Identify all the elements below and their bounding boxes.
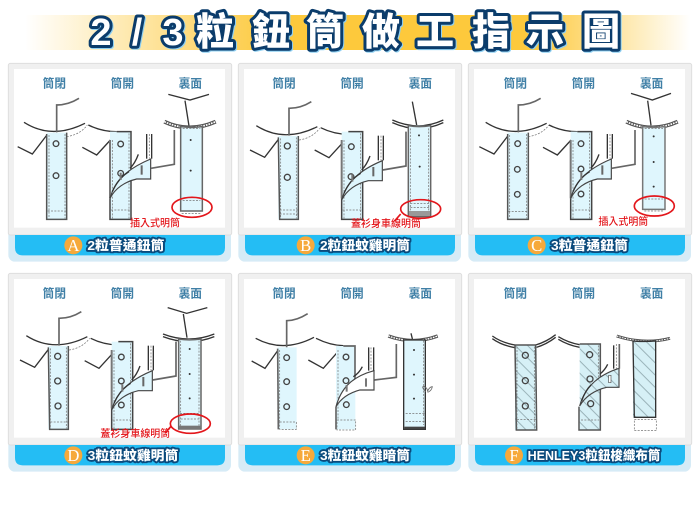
label bar: B	[300, 236, 311, 255]
back view	[626, 93, 678, 211]
panel: F HENLEY3粒鈕梭織布筒	[468, 273, 692, 472]
back view	[164, 94, 216, 213]
back view	[163, 308, 214, 429]
panel: E 3粒鈕蚊雞暗筒: 筒開	[340, 287, 364, 301]
panel: E 3粒鈕蚊雞暗筒	[238, 273, 462, 472]
label bar: F	[509, 446, 519, 465]
label bar	[64, 446, 178, 465]
back view	[617, 336, 670, 431]
panel: A 2粒普通鈕筒: 筒開	[111, 77, 134, 91]
title: 指	[472, 12, 510, 54]
panel: A 2粒普通鈕筒: 裏面	[179, 77, 202, 91]
label bar	[297, 236, 410, 255]
panel: E 3粒鈕蚊雞暗筒: 筒閉	[272, 287, 296, 301]
panel: D 3粒鈕蚊雞明筒: 裏面	[179, 287, 202, 301]
panel: D 3粒鈕蚊雞明筒: 筒閉	[43, 287, 66, 301]
label bar: 2粒鈕蚊雞明筒	[320, 238, 410, 253]
closed placket	[252, 314, 314, 429]
panel: D 3粒鈕蚊雞明筒	[8, 273, 232, 472]
callout	[351, 200, 441, 230]
title: /	[132, 12, 143, 54]
open placket	[308, 338, 396, 430]
title: 示	[526, 12, 564, 54]
panel: C 3粒普通鈕筒: 裏面	[640, 77, 664, 91]
title	[25, 12, 690, 54]
closed placket	[492, 335, 556, 430]
panel: C 3粒普通鈕筒: 筒閉	[504, 77, 527, 91]
label bar: 3粒鈕蚊雞暗筒	[320, 448, 410, 463]
callout: 插入式明筒	[130, 216, 180, 229]
panel: B 2粒鈕蚊雞明筒	[238, 63, 462, 262]
panel: F HENLEY3粒鈕梭織布筒: 筒開	[572, 287, 595, 301]
title background band	[25, 15, 690, 50]
open placket	[543, 125, 635, 219]
callout: 蓋衫身車線明筒	[351, 217, 421, 230]
panel: B 2粒鈕蚊雞明筒: 裏面	[409, 77, 432, 91]
panel: B 2粒鈕蚊雞明筒: 筒閉	[272, 77, 296, 91]
callout: 插入式明筒	[598, 215, 648, 228]
label bar: E	[301, 446, 311, 465]
title: 粒	[196, 12, 234, 54]
callout	[130, 197, 212, 229]
closed placket	[479, 98, 549, 219]
callout	[100, 414, 210, 440]
closed placket	[20, 312, 90, 429]
back view	[388, 333, 438, 429]
panel: E 3粒鈕蚊雞暗筒: 裏面	[409, 287, 432, 301]
open placket	[82, 125, 174, 219]
open placket	[85, 338, 176, 429]
label bar: A	[67, 236, 79, 255]
panel: F HENLEY3粒鈕梭織布筒: 筒閉	[504, 287, 527, 301]
open placket	[315, 128, 406, 219]
label bar: 3粒鈕蚊雞明筒	[88, 448, 178, 463]
label bar: C	[531, 236, 542, 255]
label bar: 3粒普通鈕筒	[551, 238, 628, 253]
back view	[392, 102, 443, 217]
title: 做	[362, 12, 400, 54]
title: 筒	[306, 12, 344, 54]
label bar: 2粒普通鈕筒	[87, 238, 164, 253]
title: 鈕	[252, 12, 290, 54]
label bar	[528, 236, 628, 255]
title: 圖	[582, 12, 620, 54]
label bar	[64, 236, 164, 255]
title: 3	[162, 12, 184, 54]
panel: A 2粒普通鈕筒: 筒閉	[43, 77, 66, 91]
panel: B 2粒鈕蚊雞明筒: 筒開	[340, 77, 364, 91]
title: 工	[416, 12, 454, 54]
label bar: D	[67, 446, 79, 465]
panel: A 2粒普通鈕筒	[8, 63, 232, 262]
closed placket	[250, 102, 320, 219]
label bar: HENLEY3粒鈕梭織布筒	[528, 448, 660, 463]
panel: F HENLEY3粒鈕梭織布筒: 裏面	[640, 287, 664, 301]
callout: 蓋衫身車線明筒	[100, 427, 170, 440]
title: 2	[90, 12, 112, 54]
panel: D 3粒鈕蚊雞明筒: 筒開	[111, 287, 134, 301]
label bar	[505, 446, 660, 465]
label bar	[297, 446, 410, 465]
open placket	[558, 337, 619, 430]
callout	[598, 196, 674, 228]
panel: C 3粒普通鈕筒: 筒開	[572, 77, 595, 91]
panel: C 3粒普通鈕筒	[468, 63, 692, 262]
closed placket	[18, 98, 87, 219]
